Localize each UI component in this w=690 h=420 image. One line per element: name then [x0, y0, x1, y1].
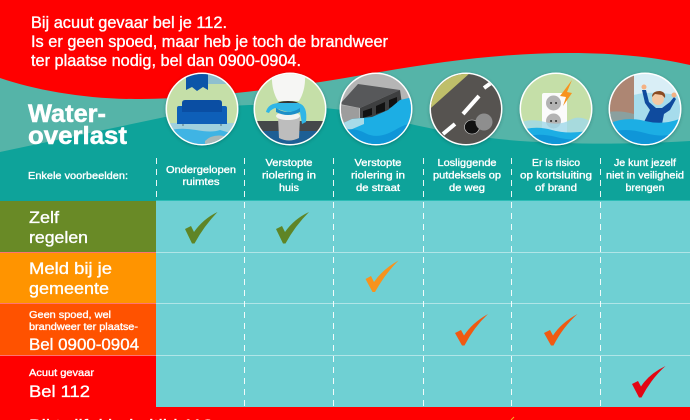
- row: bel 112: Bel 112: [29, 383, 90, 401]
- column labels: niet in veiligheid: [606, 170, 684, 182]
- row: bel 0900-0904: Bel 0900-0904: [29, 336, 139, 354]
- check: zelf regelen 1: [185, 212, 218, 244]
- row: bel 112: [0, 356, 156, 407]
- column labels: riolering in: [262, 170, 316, 182]
- column labels: Je kunt jezelf: [614, 157, 676, 169]
- header text: Bij acuut gevaar bel je 112.: [31, 14, 227, 32]
- check marks: [185, 212, 666, 398]
- row: bel 112: Acuut gevaar: [29, 367, 95, 379]
- column labels: Er is risico: [532, 157, 580, 169]
- column labels: brengen: [626, 182, 665, 194]
- row: meld bij je gemeente: [0, 253, 156, 303]
- row: zelf regelen: Zelf: [29, 209, 59, 227]
- column labels: Verstopte: [266, 157, 313, 169]
- check: bel 0900-0904, putdeksels: [455, 314, 488, 346]
- icon: flooded street drain: [339, 72, 413, 147]
- column labels: ruimtes: [182, 176, 220, 188]
- row: zelf regelen: regelen: [29, 229, 88, 247]
- icon: flooded room with sofa: [166, 72, 240, 146]
- column labels: huis: [279, 182, 299, 194]
- table background: [156, 201, 690, 407]
- column labels: Losliggende: [438, 157, 497, 169]
- title: overlast: [28, 122, 128, 150]
- check: bel 0900-0904, kortsluiting: [544, 314, 578, 346]
- check: zelf regelen 2: [276, 212, 309, 244]
- check: bel 112: [632, 366, 666, 398]
- icon: socket with spark in water: [519, 72, 593, 147]
- column labels: riolering in: [351, 170, 405, 182]
- header text: [31, 14, 388, 70]
- check: meld bij je gemeente: [366, 260, 398, 292]
- background: dark teal wave: [0, 105, 690, 201]
- background: light teal wave band: [0, 50, 690, 205]
- column labels: of brand: [535, 182, 577, 194]
- subtitle: examples: Enkele voorbeelden:: [28, 170, 128, 182]
- column labels: de weg: [449, 182, 485, 194]
- header text: ter plaatse nodig, bel dan 0900-0904.: [31, 52, 301, 70]
- column labels: Verstopte: [354, 157, 402, 169]
- column labels: Ondergelopen: [166, 164, 236, 176]
- row: zelf regelen: [0, 201, 156, 252]
- column labels: op kortsluiting: [520, 170, 592, 182]
- row: meld bij je gemeente: Meld bij je: [29, 260, 112, 278]
- small yellow mark in bottom bar: [511, 417, 514, 420]
- bottom bar: [0, 407, 690, 420]
- row: bel 0900-0904: brandweer ter plaatse-: [29, 321, 139, 333]
- column labels: [166, 157, 684, 194]
- row: meld bij je gemeente: gemeente: [29, 280, 109, 298]
- icon: loose manhole cover on road: [429, 72, 503, 147]
- title: [28, 100, 128, 150]
- title: Water-: [28, 100, 106, 128]
- row lines and column dividers: [0, 158, 690, 406]
- icon: blocked toilet: [253, 72, 327, 148]
- column labels: putdeksels op: [433, 170, 501, 182]
- column labels: de straat: [356, 182, 400, 194]
- red header wave: [0, 0, 690, 99]
- row: bel 0900-0904: Geen spoed, wel: [29, 309, 111, 321]
- header text: Is er geen spoed, maar heb je toch de brandweer: [31, 33, 388, 51]
- icon: person drowning: [608, 72, 684, 147]
- row: bel 0900-0904: [0, 304, 156, 355]
- table top edge: [156, 200, 690, 201]
